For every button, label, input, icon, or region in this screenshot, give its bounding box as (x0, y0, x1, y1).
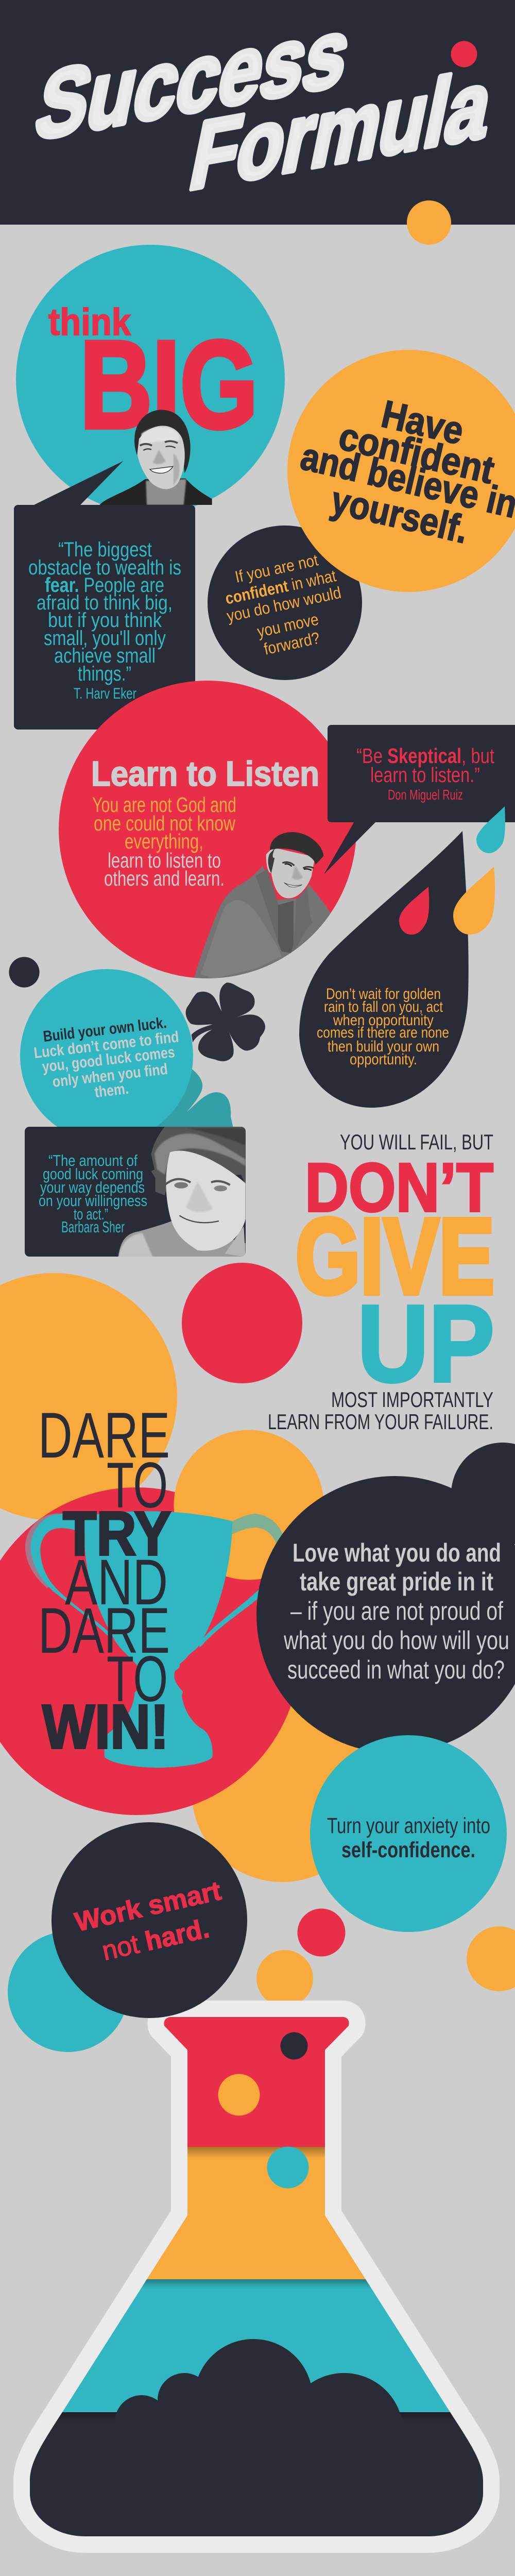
icon: dark clover (186, 982, 265, 1061)
if you are not confident text: If you are not (233, 551, 320, 586)
work smart text (72, 1876, 224, 1967)
quote text: on your willingness (39, 1192, 147, 1210)
panel: learn to listen (59, 681, 356, 979)
portrait: T. Harv Eker (99, 410, 212, 505)
teal drop (476, 806, 505, 853)
panel: work smart (52, 1822, 247, 2018)
learn to listen body: one could not know (94, 811, 235, 835)
if you are not confident text: forward? (262, 629, 321, 658)
quote text: fear. People are (45, 574, 164, 597)
quote text: small, you'll only (44, 627, 166, 650)
learn to listen body: You are not God and (92, 793, 236, 817)
if you are not confident text (224, 551, 343, 658)
dare to try and dare to win text: AND (65, 1547, 168, 1618)
flask bubble teal (267, 2146, 309, 2189)
speech tail (33, 461, 123, 505)
self confidence text (327, 1814, 490, 1862)
title (28, 0, 502, 210)
work smart text: not hard. (99, 1913, 212, 1967)
teal circle (20, 969, 193, 1142)
DON'T heading: DON’T (305, 1149, 493, 1226)
have confident text (297, 392, 515, 551)
flask glass outline (30, 2017, 483, 2536)
portrait: Barbara Sher (118, 1127, 246, 1257)
bubble: small red (298, 1908, 345, 1957)
quote text: afraid to think big, (37, 591, 173, 614)
BIG heading: BIG (80, 315, 258, 454)
teardrop text: comes if there are none (317, 1024, 449, 1041)
orange circle (287, 350, 515, 592)
quote text: learn to listen.” (370, 763, 480, 787)
panel: don't give up (268, 1130, 494, 1434)
if you are not confident text: you move (255, 609, 320, 641)
red drop (399, 887, 429, 935)
quote text: “The amount of (48, 1151, 138, 1170)
self confidence text: self-confidence. (341, 1838, 475, 1862)
quote text: good luck coming (43, 1165, 143, 1183)
work smart text: Work smart (72, 1876, 224, 1938)
flask bubble dark (280, 2032, 308, 2060)
panel: think big (16, 245, 285, 514)
luck text: you, good luck comes (41, 1044, 176, 1076)
dark circle (52, 1822, 247, 2018)
dare to try and dare to win text: TO (107, 1450, 168, 1521)
luck text: Build your own luck. (42, 1014, 167, 1045)
bubble: lower left teal (8, 1931, 128, 2052)
decorative red circle (182, 1263, 302, 1383)
quote text (28, 538, 181, 702)
quote text: T. Harv Eker (74, 685, 136, 702)
flask (0, 2009, 515, 2541)
teardrop text: when opportunity (333, 1012, 434, 1029)
quote text: obstacle to wealth is (28, 556, 181, 579)
panel: love what you do (256, 1443, 515, 1753)
teardrop text: opportunity. (350, 1051, 417, 1068)
have confident text: yourself. (327, 478, 472, 551)
lower orange circle (192, 1701, 373, 1882)
flask liquid layers (30, 2017, 483, 2536)
panel: Don Miguel Ruiz quote (324, 725, 515, 874)
learn to listen body: learn to listen to (108, 849, 221, 872)
dark bump circle (451, 1443, 515, 1546)
panel: T. Harv Eker quote (14, 461, 195, 730)
card (25, 1127, 246, 1257)
orange circle with message (208, 350, 515, 680)
teardrop text: then build your own (328, 1038, 439, 1055)
quote text: Don Miguel Ruiz (388, 787, 463, 803)
red circle (59, 681, 356, 978)
dare to try and dare to win text (38, 1400, 171, 1761)
icon: teal clover (156, 1069, 233, 1127)
have confident text: Have (377, 392, 468, 453)
portrait: Don Miguel Ruiz (194, 832, 331, 979)
flask bubble orange (218, 2074, 260, 2115)
quote text: but if you think (48, 609, 162, 632)
dare to try and dare to win text: DARE (38, 1400, 170, 1471)
if you are not confident text: confident in what (224, 566, 338, 608)
quote box (328, 725, 515, 822)
quote text: “Be Skeptical, but (356, 744, 494, 768)
teal circle (310, 1735, 507, 1932)
dare to try and dare to win text: DARE (38, 1595, 170, 1667)
luck text: Luck don’t come to find (33, 1028, 180, 1062)
large dark teardrop (299, 831, 469, 1108)
quote text: achieve small (54, 645, 156, 667)
bubble: right orange (467, 1926, 515, 1991)
panel: build your own luck (20, 969, 265, 1142)
dare to try and dare to win text: TO (107, 1643, 168, 1715)
think heading: think (48, 301, 131, 343)
learn to listen heading: Learn to Listen (91, 754, 319, 793)
bubble: small orange (256, 1950, 313, 2007)
learn to listen body: others and learn. (104, 867, 225, 890)
quote text: Barbara Sher (61, 1218, 125, 1236)
dare to try and dare to win text: TRY (63, 1498, 171, 1568)
if you are not confident text: you do how would (225, 583, 343, 625)
quote text (356, 744, 494, 803)
header band (0, 0, 515, 225)
dark dot (9, 957, 40, 988)
dark circle (256, 1476, 515, 1753)
panel: dare to try (0, 1273, 373, 1882)
red circle (0, 1487, 300, 1815)
quote text: to act.” (74, 1205, 108, 1223)
large orange circle (0, 1273, 177, 1520)
orange drop (453, 867, 495, 935)
teardrop text: rain to fall on you, act (324, 998, 443, 1015)
UP heading: UP (357, 1282, 494, 1404)
teardrop text (317, 986, 449, 1068)
quote box (14, 505, 195, 730)
panel: Barbara Sher quote (25, 1127, 246, 1257)
teardrop text: Don’t wait for golden (326, 986, 441, 1003)
luck text: them. (94, 1080, 129, 1101)
panel: opportunity teardrop (299, 806, 505, 1108)
love text (283, 1538, 509, 1684)
dare to try and dare to win text: WIN! (42, 1691, 169, 1761)
panel: have confident (208, 350, 515, 680)
header orange dot (407, 200, 451, 245)
quote text: “The biggest (58, 538, 152, 561)
header red dot (451, 41, 477, 67)
quote text: things.” (78, 663, 131, 685)
speech tail (324, 822, 376, 874)
teal circle (16, 245, 285, 514)
learn to listen body: everything, (125, 829, 203, 853)
quote text: your way depends (40, 1178, 145, 1196)
luck text (33, 1014, 180, 1101)
icon: trophy (25, 1511, 284, 1768)
upper orange circle (174, 1430, 323, 1580)
flask cloud (115, 2339, 403, 2492)
dark circle: if you are not confident (208, 526, 362, 680)
quote text (39, 1151, 147, 1236)
luck text: only when you find (52, 1061, 168, 1091)
learn to listen body (92, 793, 236, 890)
have confident text: confident (335, 414, 498, 492)
panel: self confidence (310, 1735, 507, 1932)
